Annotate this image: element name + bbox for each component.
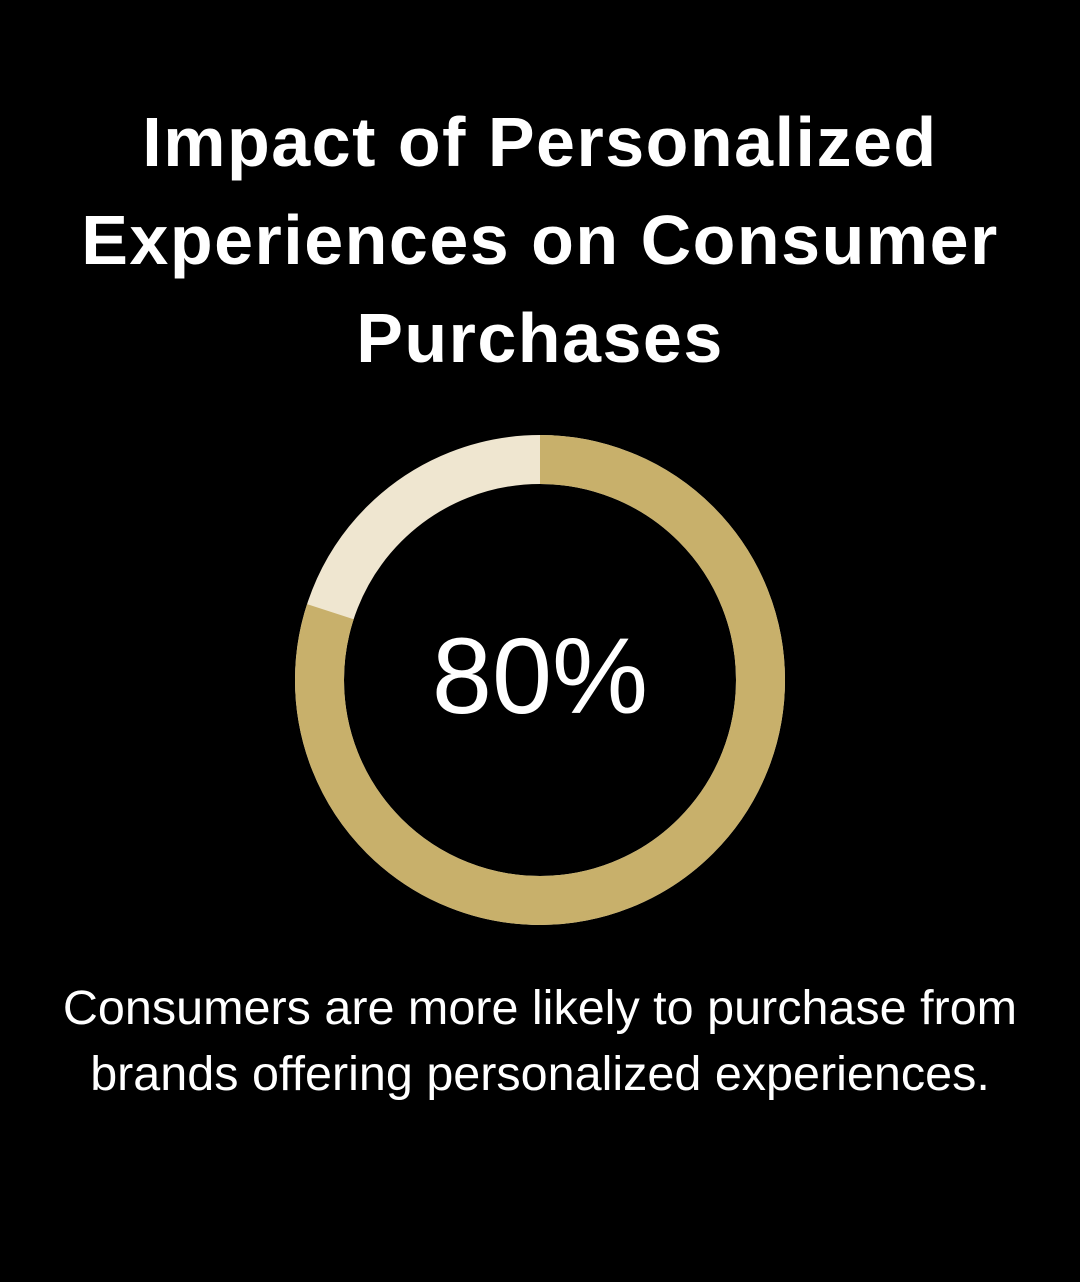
- caption: [63, 981, 1017, 1101]
- title: [81, 103, 999, 377]
- title: Experiences on Consumer: [81, 201, 999, 279]
- title: Purchases: [356, 299, 724, 377]
- caption: Consumers are more likely to purchase from: [63, 981, 1017, 1035]
- caption: brands offering personalized experiences.: [90, 1047, 990, 1101]
- title: Impact of Personalized: [142, 103, 938, 181]
- donut chart: 80%: [432, 615, 648, 736]
